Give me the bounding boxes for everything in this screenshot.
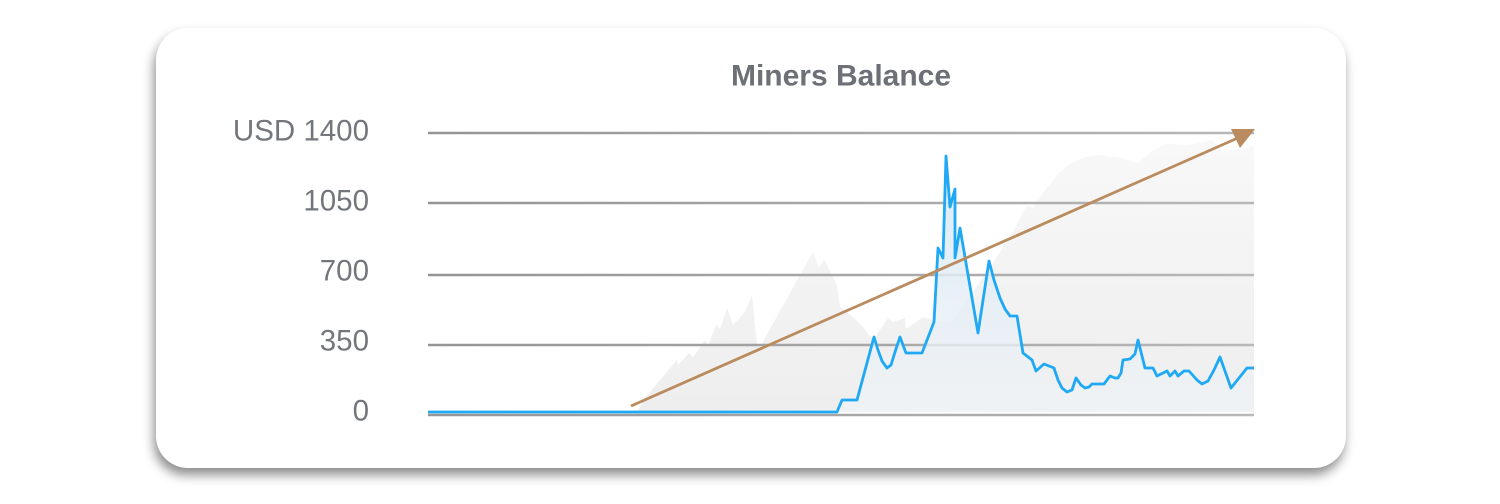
y axis labels: 0	[353, 394, 369, 428]
grey area: price background	[637, 140, 1254, 412]
arrow: upward trend	[631, 129, 1255, 406]
y axis labels	[233, 114, 369, 428]
y axis labels: 1050	[303, 184, 369, 218]
title: Miners Balance	[731, 60, 951, 92]
blue line: miners balance	[428, 156, 1254, 412]
panel: chart card	[156, 28, 1346, 468]
grid lines	[428, 133, 1254, 415]
blue area: miners balance fill	[837, 156, 1254, 412]
y axis labels: 350	[320, 324, 369, 358]
y axis labels: 700	[320, 254, 369, 288]
y axis labels: USD 1400	[233, 114, 369, 148]
